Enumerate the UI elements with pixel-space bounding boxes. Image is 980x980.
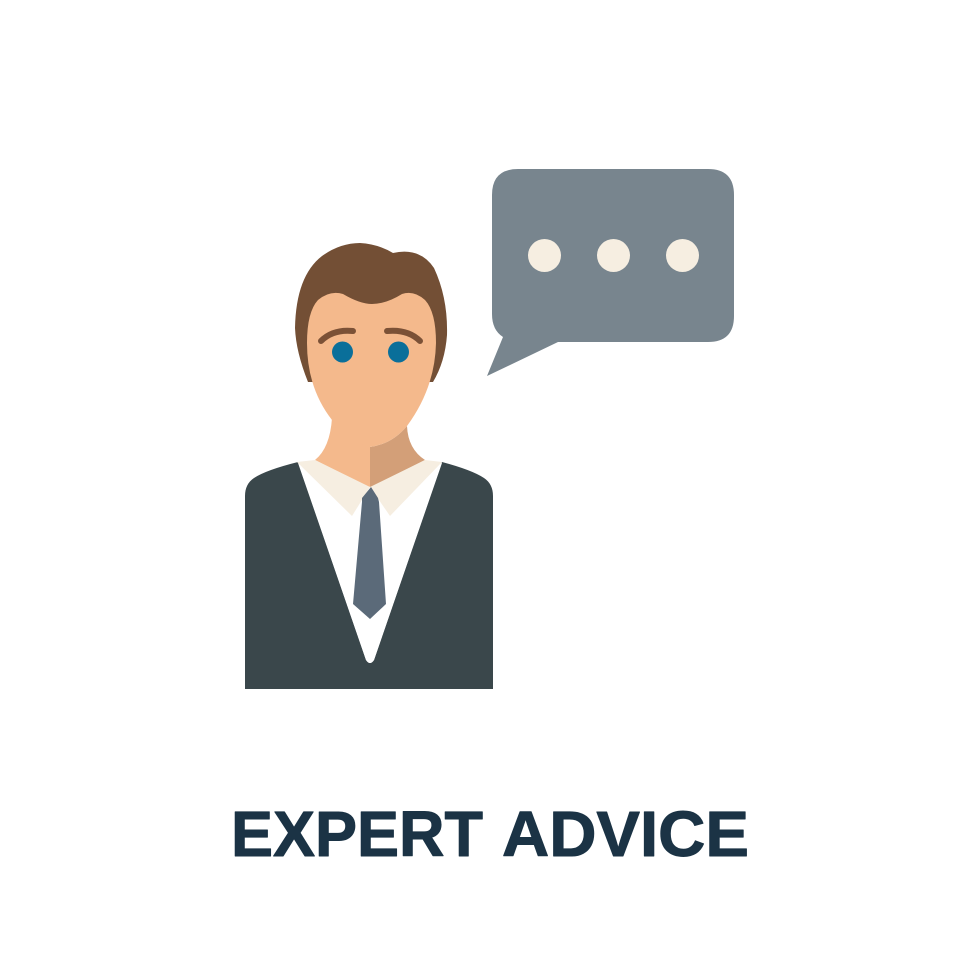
face (307, 293, 436, 447)
right eye (388, 342, 409, 362)
neck shadow (370, 426, 425, 488)
right eyebrow (387, 331, 420, 341)
left eyebrow (321, 331, 353, 341)
neck (315, 418, 370, 488)
shirt (298, 463, 442, 663)
icon: speech bubble (487, 169, 734, 376)
jacket (245, 462, 493, 689)
icon: businessman (245, 243, 493, 689)
dot: middle (597, 239, 630, 272)
tie (353, 487, 386, 619)
word: advice: ADVICE (502, 798, 749, 870)
left eye (332, 342, 353, 362)
title (231, 798, 749, 870)
dot: left (528, 239, 561, 272)
dot: right (666, 239, 699, 272)
word: expert: EXPERT (231, 798, 483, 870)
right collar (370, 460, 442, 516)
left collar (297, 460, 370, 516)
hair (295, 243, 447, 382)
